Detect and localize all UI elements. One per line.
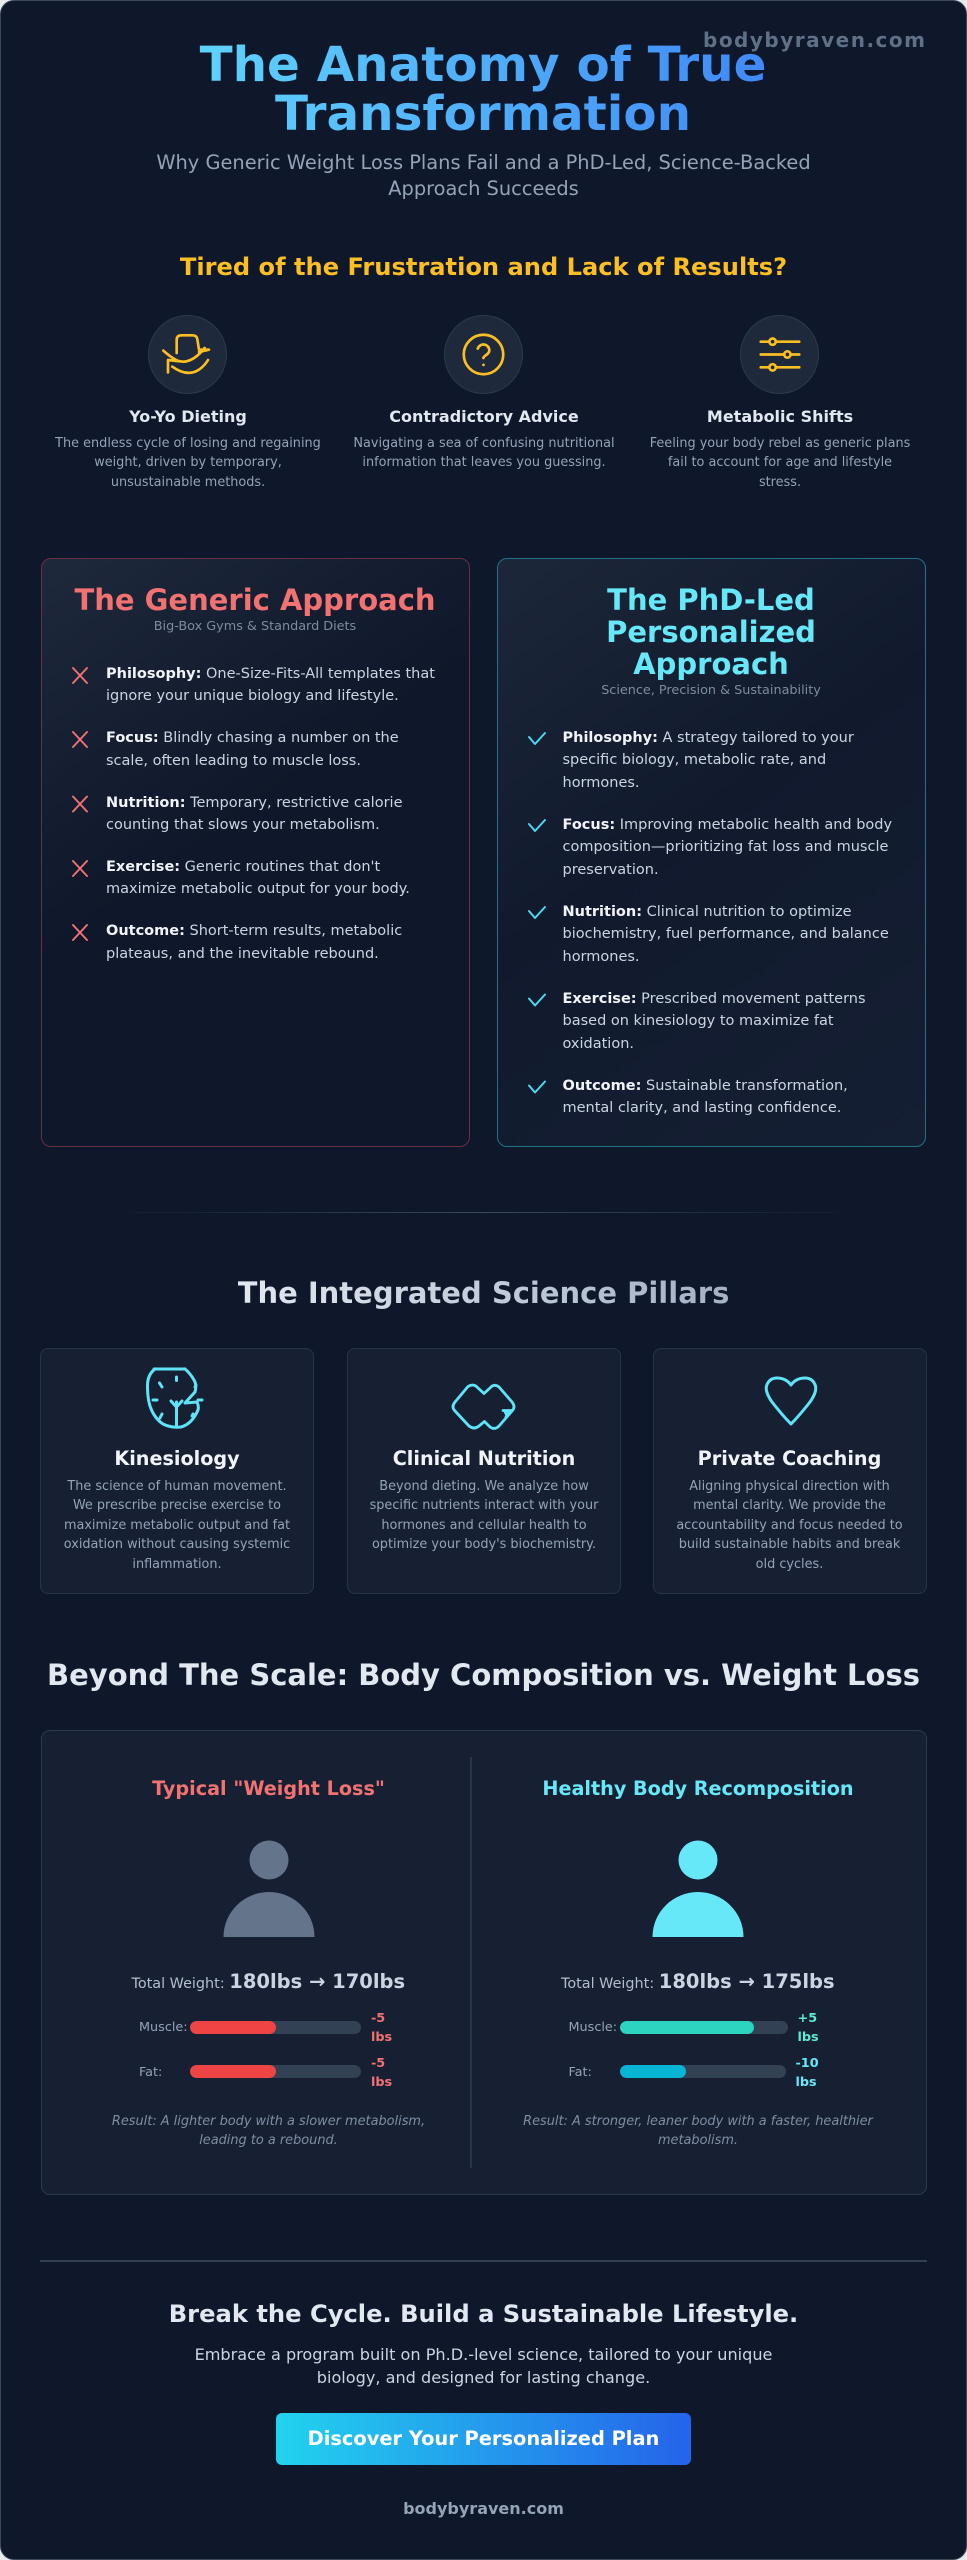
- panel title: Approach: [633, 647, 789, 681]
- total weight: Total Weight: 180lbs → 170lbs: [132, 1970, 405, 1993]
- item: philosophy: specific biology, metabolic rate, and: [562, 752, 826, 768]
- heading: tired of frustration: Tired of the Frustration and Lack of Results?: [180, 253, 787, 281]
- column: typical weight loss: [112, 1777, 425, 2148]
- result note: metabolism.: [658, 2133, 738, 2148]
- panel: kinesiology: [40, 1348, 314, 1594]
- pillar description: mental clarity. We provide the: [693, 1498, 886, 1513]
- item: exercise: [562, 990, 866, 1052]
- description: unsustainable methods.: [111, 475, 265, 490]
- icon: brain: [146, 1367, 204, 1429]
- value: -5: [371, 2056, 385, 2070]
- pillar description: Aligning physical direction with: [689, 1479, 890, 1494]
- list: personalized approach points: [528, 730, 892, 1116]
- item: focus: Focus: Improving metabolic health and body: [562, 816, 892, 832]
- description: [650, 436, 910, 490]
- pillar title: Private Coaching: [698, 1447, 881, 1470]
- icon: nutrition shape: [452, 1384, 516, 1430]
- panel title: The Generic Approach: [74, 582, 436, 616]
- panel: body composition comparison: [41, 1730, 927, 2195]
- icon: person grey: [224, 1840, 314, 1937]
- pillar description: Beyond dieting. We analyze how: [379, 1479, 589, 1494]
- item: nutrition: Nutrition: Temporary, restrictive calorie: [106, 794, 402, 810]
- item: exercise: maximize metabolic output for your body.: [106, 881, 410, 897]
- cross icons: [72, 667, 88, 941]
- header: title and subtitle: [156, 37, 811, 200]
- description: weight, driven by temporary,: [94, 455, 282, 470]
- label: Yo-Yo Dieting: [129, 407, 247, 426]
- item: exercise: oxidation.: [562, 1036, 634, 1052]
- cta heading: Break the Cycle. Build a Sustainable Lifestyle.: [169, 2300, 798, 2328]
- description: stress.: [759, 475, 801, 490]
- label: Contradictory Advice: [389, 407, 579, 426]
- footer website: bodybyraven.com: [403, 2499, 564, 2518]
- muscle bar row: [139, 2010, 392, 2045]
- pillar title: Clinical Nutrition: [393, 1447, 575, 1470]
- pillar description: oxidation without causing systemic: [64, 1537, 290, 1552]
- pillar description: [676, 1479, 903, 1572]
- item: outcome: Outcome: Short-term results, metabolic: [106, 923, 402, 939]
- bar: [620, 2021, 788, 2034]
- yo-yo dieting text: [55, 407, 321, 490]
- description: [353, 436, 615, 470]
- panel title: [606, 582, 816, 681]
- item: outcome: mental clarity, and lasting confidence.: [562, 1100, 841, 1116]
- description: The endless cycle of losing and regaining: [55, 436, 321, 451]
- column heading: Typical "Weight Loss": [152, 1777, 385, 1800]
- cta button: [276, 2413, 691, 2465]
- description: Feeling your body rebel as generic plans: [650, 436, 910, 451]
- value: [798, 2008, 819, 2047]
- panel: the generic approach: [41, 558, 470, 1147]
- subtitle: [156, 151, 811, 200]
- panel: private coaching: [652, 1348, 926, 1594]
- value: lbs: [371, 2075, 392, 2090]
- icon: heart: [764, 1376, 818, 1426]
- value: lbs: [796, 2075, 817, 2090]
- section: frustrations: [55, 253, 910, 490]
- item: nutrition: [106, 794, 402, 833]
- metabolic shifts text: [650, 407, 910, 490]
- value: -5: [371, 2010, 385, 2026]
- watermark: bodybyraven.com: [703, 28, 926, 52]
- item: philosophy: Philosophy: One-Size-Fits-All templates that: [106, 666, 435, 682]
- muscle bar row: [568, 2001, 828, 2045]
- panel: the PhD-led personalized approach: [497, 558, 926, 1147]
- item: focus: preservation.: [562, 862, 659, 878]
- result note: Result: A lighter body with a slower metabolism,: [112, 2114, 425, 2128]
- item: outcome: plateaus, and the inevitable rebound.: [106, 946, 379, 962]
- cta paragraph: Embrace a program built on Ph.D.-level science, tailored to your unique: [195, 2345, 772, 2364]
- value: [371, 2056, 392, 2090]
- icon: metabolic shifts: [740, 314, 818, 394]
- title: [198, 41, 768, 139]
- pillar description: The science of human movement.: [67, 1479, 287, 1494]
- pillar description: accountability and focus needed to: [676, 1518, 903, 1533]
- item: outcome: Outcome: Sustainable transformation,: [562, 1078, 848, 1094]
- bar: [190, 2021, 361, 2034]
- pillar title: Kinesiology: [114, 1447, 240, 1470]
- pillar description: We prescribe precise exercise to: [73, 1498, 281, 1513]
- value: lbs: [798, 2030, 819, 2045]
- item: philosophy: [106, 666, 435, 704]
- pillar description: build sustainable habits and break: [679, 1537, 900, 1552]
- item: philosophy: [562, 730, 854, 790]
- item: outcome: [562, 1078, 848, 1116]
- item: nutrition: Nutrition: Clinical nutrition to optimize: [562, 904, 852, 920]
- cta button: Discover Your Personalized Plan: [308, 2427, 659, 2450]
- icon: person cyan: [652, 1840, 744, 1938]
- pillar description: maximize metabolic output and fat: [64, 1518, 290, 1533]
- item: exercise: Exercise: Generic routines that don't: [106, 859, 380, 875]
- item: nutrition: biochemistry, fuel performance, and balance: [562, 926, 889, 942]
- item: nutrition: hormones.: [562, 948, 640, 964]
- icon: yo-yo dieting: [148, 314, 226, 394]
- result note: Result: A stronger, leaner body with a faster, healthier: [523, 2114, 873, 2128]
- title: The Anatomy of True: [200, 37, 766, 93]
- pillar description: [64, 1479, 290, 1572]
- fat bar row: [568, 2046, 828, 2090]
- title: Transformation: [275, 86, 691, 142]
- item: focus: Focus: Blindly chasing a number on the: [106, 730, 399, 746]
- panel subtitle: Science, Precision & Sustainability: [601, 682, 821, 698]
- contradictory advice text: [353, 407, 615, 470]
- subtitle: Approach Succeeds: [388, 177, 579, 200]
- label: Muscle:: [139, 2020, 188, 2034]
- item: focus: scale, often leading to muscle loss.: [106, 752, 361, 768]
- label: Fat:: [139, 2064, 162, 2080]
- item: philosophy: hormones.: [562, 774, 640, 790]
- result note: [472, 2112, 924, 2150]
- description: [55, 436, 321, 490]
- value: -10: [796, 2056, 819, 2070]
- result note: leading to a rebound.: [199, 2133, 338, 2148]
- panel title: The PhD-Led: [607, 582, 815, 616]
- value: [371, 2010, 392, 2045]
- value: [796, 2054, 819, 2092]
- section: call to action: [40, 2295, 927, 2530]
- bar: [190, 2065, 361, 2078]
- pillar description: inflammation.: [132, 1557, 222, 1572]
- pillar description: specific nutrients interact with your: [370, 1498, 598, 1513]
- item: exercise: [106, 859, 410, 897]
- pillar description: old cycles.: [756, 1557, 823, 1572]
- cta paragraph: [40, 2343, 927, 2389]
- item: outcome: [106, 923, 402, 962]
- bar: [620, 2065, 786, 2078]
- item: focus: [106, 730, 399, 768]
- description: information that leaves you guessing.: [362, 455, 606, 470]
- item: focus: composition—prioritizing fat loss and muscle: [562, 839, 888, 855]
- result note: [112, 2114, 425, 2148]
- item: philosophy: ignore your unique biology and lifestyle.: [106, 688, 399, 704]
- item: philosophy: Philosophy: A strategy tailored to your: [562, 730, 854, 746]
- check icons: [528, 732, 546, 1094]
- heading: beyond the scale: Beyond The Scale: Body Composition vs. Weight Loss: [47, 1658, 920, 1692]
- pillar description: [370, 1479, 598, 1552]
- column heading: Healthy Body Recomposition: [542, 1777, 854, 1800]
- item: focus: [562, 816, 892, 878]
- icon: contradictory advice: [444, 314, 522, 394]
- description: Navigating a sea of confusing nutritional: [353, 436, 615, 451]
- column: healthy body recomposition: [523, 1777, 874, 2148]
- description: fail to account for age and lifestyle: [668, 455, 892, 470]
- total weight: Total Weight: 180lbs → 175lbs: [561, 1970, 835, 1993]
- value: lbs: [371, 2030, 392, 2045]
- fat bar row: [139, 2056, 392, 2090]
- item: nutrition: counting that slows your metabolism.: [106, 817, 380, 833]
- item: exercise: based on kinesiology to maximize fat: [562, 1013, 834, 1029]
- pillar description: hormones and cellular health to: [381, 1518, 587, 1533]
- item: exercise: Exercise: Prescribed movement patterns: [562, 990, 866, 1006]
- item: nutrition: [562, 904, 889, 964]
- label: Metabolic Shifts: [707, 407, 853, 426]
- label: Muscle:: [568, 2020, 617, 2034]
- subtitle: Why Generic Weight Loss Plans Fail and a PhD-Led, Science-Backed: [156, 151, 811, 174]
- panel title: Personalized: [606, 615, 816, 649]
- cta paragraph: biology, and designed for lasting change.: [317, 2368, 650, 2387]
- value: +5: [798, 2010, 817, 2026]
- list: generic approach points: [72, 666, 435, 962]
- panel subtitle: Big-Box Gyms & Standard Diets: [154, 618, 356, 634]
- label: Fat:: [568, 2064, 592, 2080]
- heading: integrated science pillars: The Integrated Science Pillars: [238, 1276, 729, 1310]
- pillar description: optimize your body's biochemistry.: [372, 1537, 596, 1552]
- panel: clinical nutrition: [347, 1348, 621, 1594]
